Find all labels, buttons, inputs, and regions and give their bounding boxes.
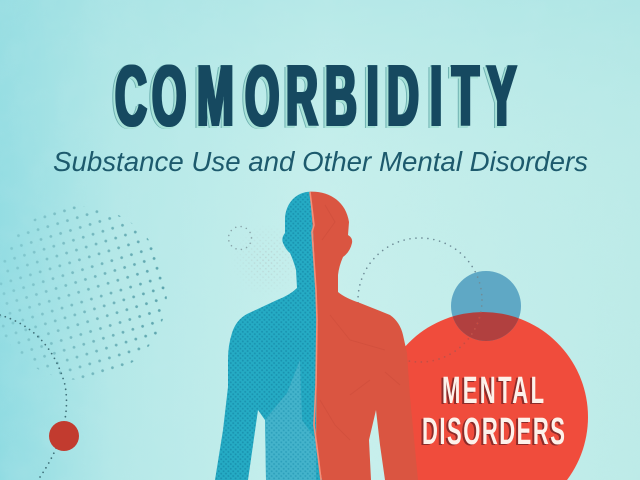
human figure [215, 192, 418, 480]
red circle [378, 312, 588, 480]
label: mental disorders [422, 369, 565, 453]
icon: small red circle [49, 421, 79, 451]
figure: blue half [215, 192, 322, 480]
subtitle: Substance Use and Other Mental Disorders [53, 146, 588, 177]
figure: red half [310, 192, 418, 480]
label: mental disorders: DISORDERS [422, 410, 565, 453]
figure: paper creases [320, 205, 400, 440]
label: mental disorders: MENTAL [442, 369, 544, 412]
dotted orbit circle [358, 238, 482, 362]
title: COMORBIDITY [115, 50, 516, 144]
figure: torn paper edge [310, 192, 321, 480]
small dotted circle [228, 226, 252, 250]
faint halftone patch [243, 234, 292, 286]
blue circle [451, 271, 521, 341]
dotted arc left [0, 315, 66, 480]
halftone circle left [0, 206, 167, 380]
